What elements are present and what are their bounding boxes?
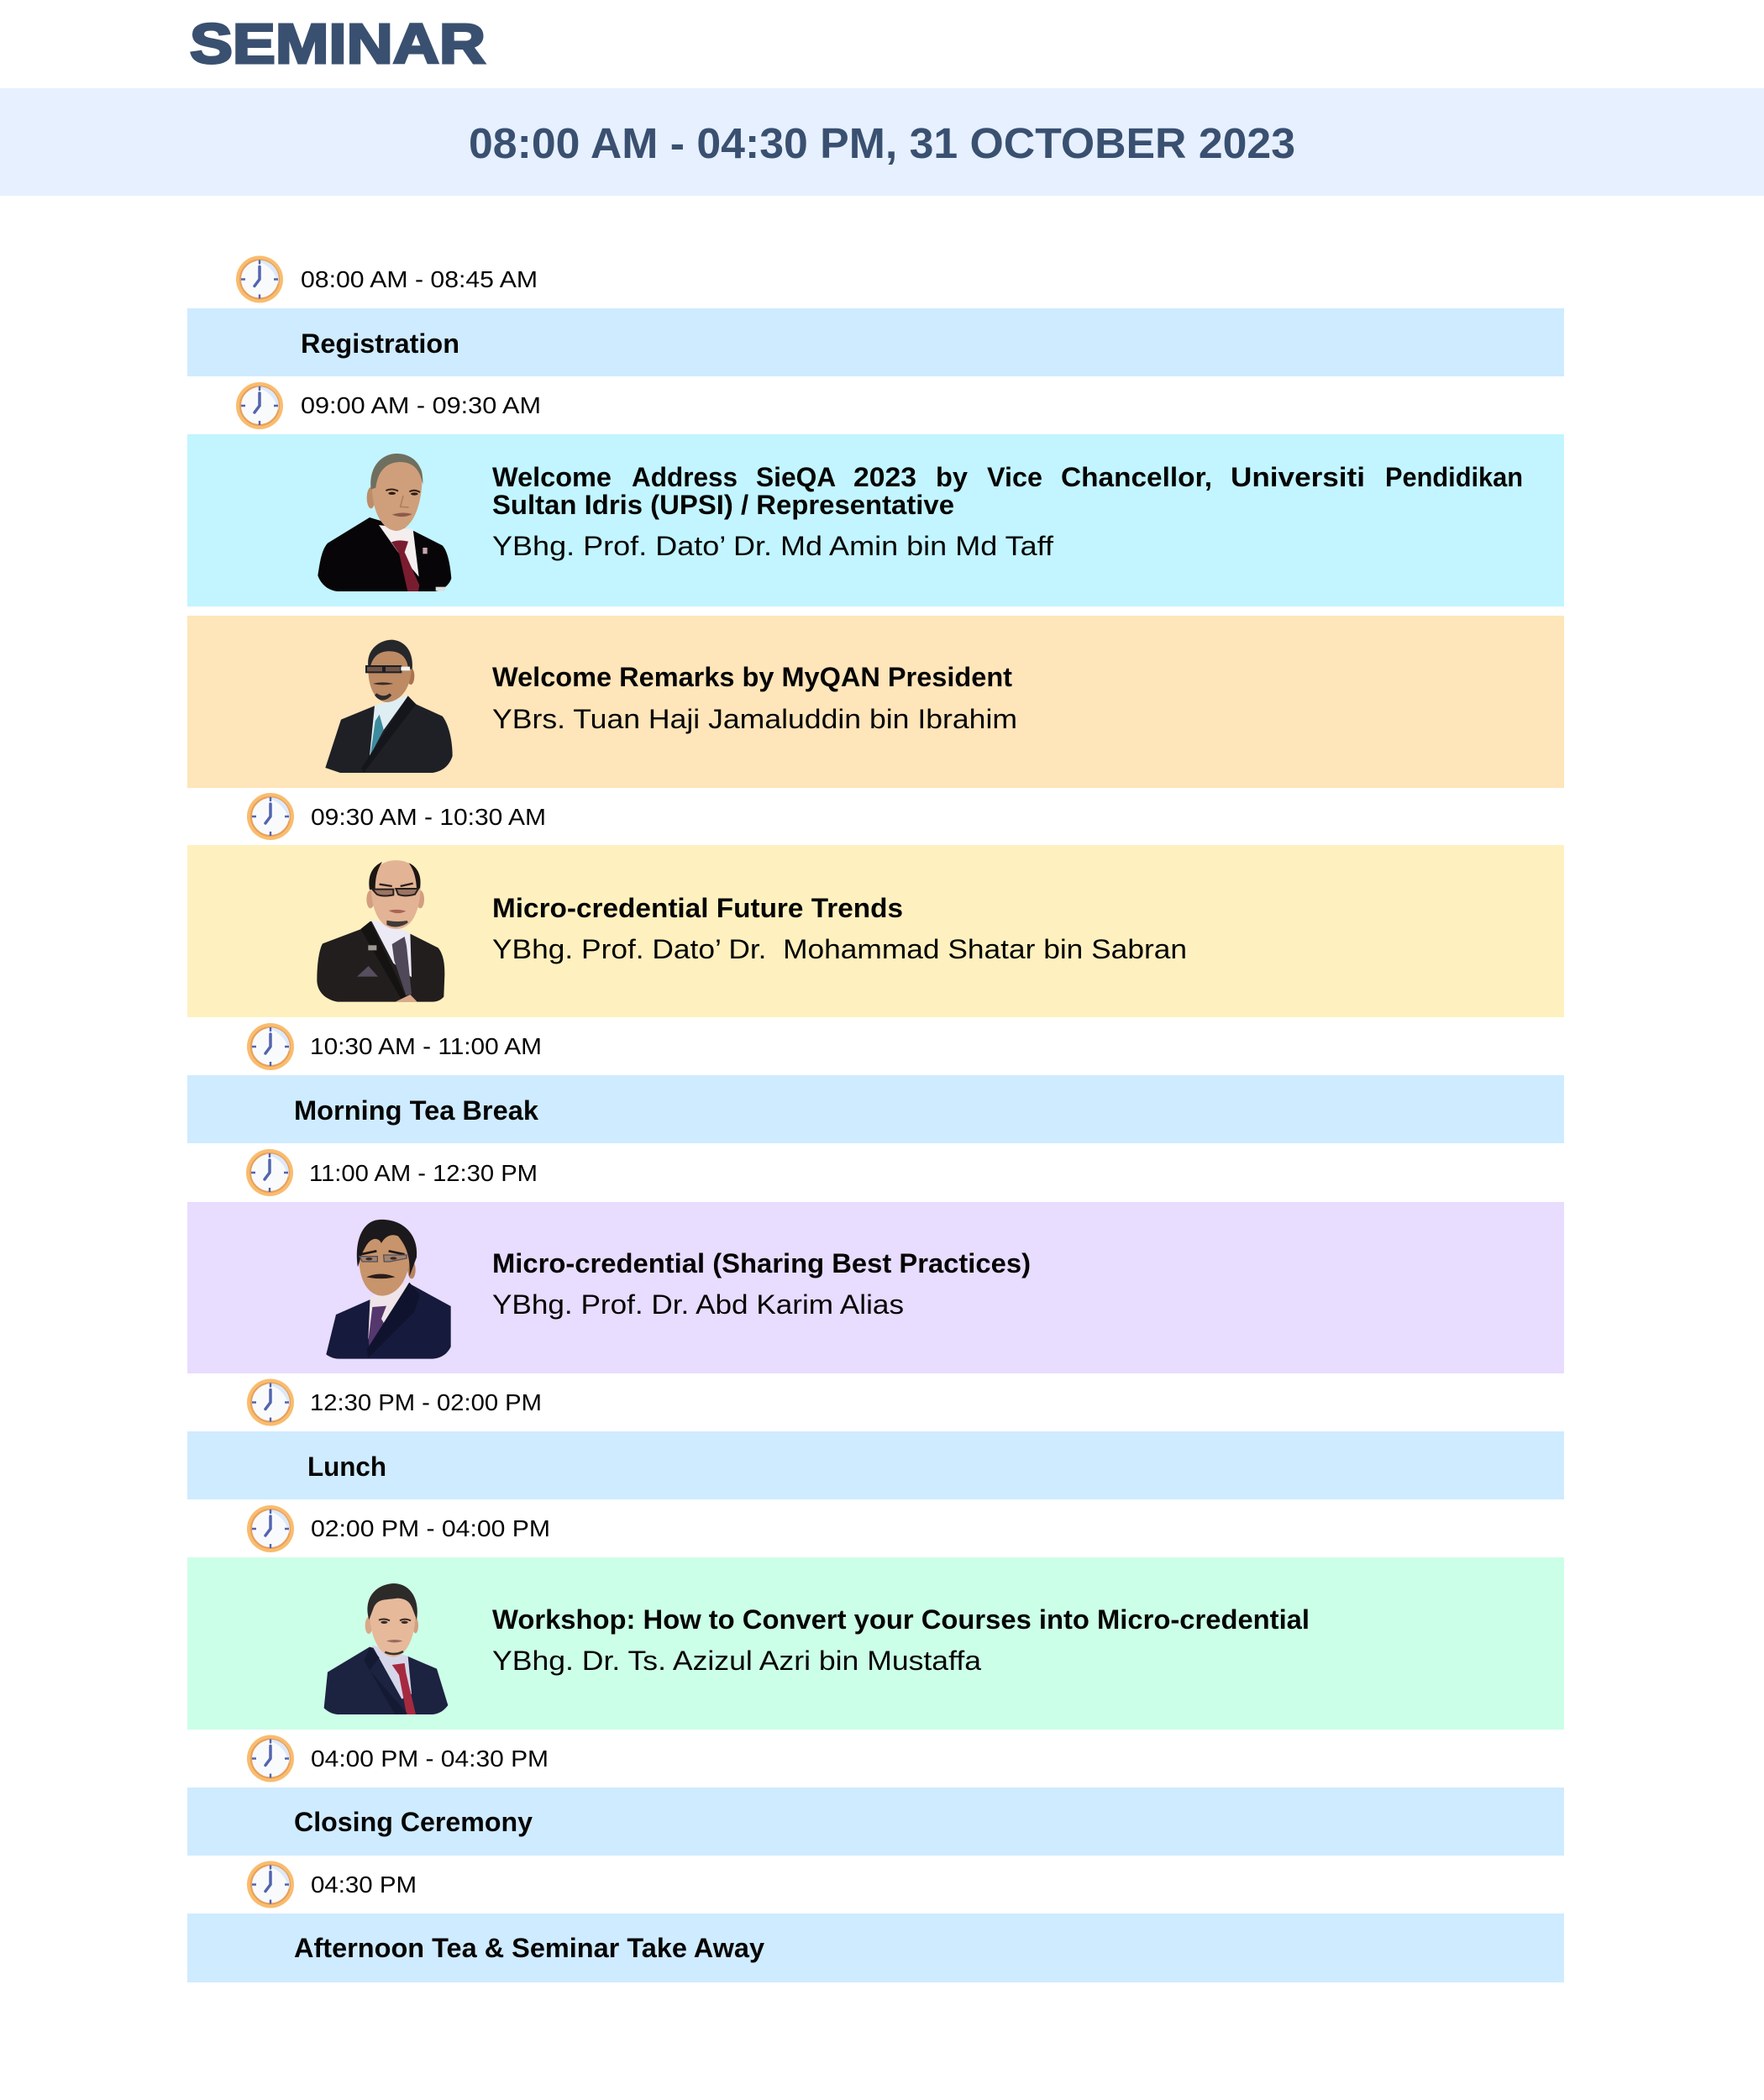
icon: clock (247, 1861, 294, 1908)
panel: morning tea break (187, 1075, 1564, 1143)
time slot: 08:00 (236, 255, 538, 302)
time slot: 02:00 (247, 1505, 550, 1552)
icon: clock (247, 1023, 294, 1070)
panel: registration (187, 308, 1564, 376)
time slot: 09:30: 09:30 AM - 10:30 AM (311, 804, 546, 830)
time slot: 09:00: 09:00 AM - 09:30 AM (301, 392, 541, 418)
title: SEMINAR (190, 13, 486, 76)
panel: welcome remarks: YBrs. Tuan Haji Jamaluddin bin Ibrahim (492, 704, 1017, 734)
panel: closing ceremony (187, 1788, 1564, 1856)
time slot: 11:00: 11:00 AM - 12:30 PM (309, 1160, 538, 1186)
time slot: 02:00: 02:00 PM - 04:00 PM (311, 1515, 550, 1541)
panel: welcome address: Vice (987, 462, 1042, 492)
panel: workshop: Workshop: How to Convert your Courses into Micro-credential (492, 1604, 1310, 1635)
time slot: 12:30: 12:30 PM - 02:00 PM (310, 1389, 542, 1415)
panel: welcome address: 2023 (853, 462, 916, 492)
panel: welcome address: Universiti (1231, 462, 1365, 492)
panel: sharing best practices (187, 1202, 1564, 1373)
panel: micro-credential future trends: Micro-credential Future Trends (492, 893, 903, 923)
time slot: 10:30: 10:30 AM - 11:00 AM (310, 1033, 542, 1059)
time slot: 10:30 (247, 1023, 542, 1070)
panel: sharing best practices: Micro-credential (Sharing Best Practices) (492, 1248, 1031, 1278)
panel: welcome address (187, 434, 1564, 606)
date banner: 08:00 AM - 04:30 PM, 31 OCTOBER 2023 (469, 119, 1295, 167)
time slot: 04:30: 04:30 PM (311, 1872, 417, 1898)
time slot: 09:30 (247, 793, 546, 840)
icon: clock (247, 1379, 294, 1426)
panel: welcome address: Welcome (492, 462, 612, 492)
portrait: vice chancellor (318, 454, 451, 591)
time slot: 12:30 (247, 1379, 542, 1426)
panel: welcome address: Address (632, 462, 738, 492)
panel: welcome address: Sultan Idris (UPSI) / Representative (492, 490, 954, 520)
panel: welcome remarks (187, 616, 1564, 788)
portrait: workshop speaker (324, 1583, 448, 1714)
icon: clock (236, 255, 283, 302)
panel: welcome address: Chancellor, (1061, 462, 1212, 492)
time slot: 08:00: 08:00 AM - 08:45 AM (301, 266, 538, 292)
icon: clock (247, 1505, 294, 1552)
panel: closing ceremony: Closing Ceremony (294, 1807, 533, 1837)
icon: clock (236, 382, 283, 429)
panel: micro-credential future trends (187, 845, 1564, 1017)
panel: welcome address: Pendidikan (1385, 462, 1523, 492)
time slot: 11:00 (246, 1149, 538, 1196)
time slot: 04:30 (247, 1861, 417, 1908)
time slot: 04:00: 04:00 PM - 04:30 PM (311, 1746, 549, 1772)
panel: sharing best practices: YBhg. Prof. Dr. Abd Karim Alias (492, 1289, 904, 1320)
panel: welcome address: by (936, 462, 968, 492)
icon: clock (247, 793, 294, 840)
panel: morning tea break: Morning Tea Break (294, 1095, 538, 1126)
panel: welcome address: YBhg. Prof. Dato’ Dr. Md Amin bin Md Taff (492, 531, 1053, 561)
panel: micro-credential future trends: YBhg. Prof. Dato’ Dr. Mohammad Shatar bin Sabran (492, 934, 1187, 964)
time slot: 09:00 (236, 382, 541, 429)
date banner (0, 88, 1764, 196)
icon: clock (247, 1735, 294, 1782)
panel: lunch (187, 1431, 1564, 1499)
portrait: keynote speaker (317, 860, 444, 1002)
panel: welcome address: SieQA (756, 462, 836, 492)
panel: registration: Registration (301, 328, 459, 359)
portrait: best practice speaker (326, 1220, 451, 1359)
icon: clock (246, 1149, 293, 1196)
panel: welcome remarks: Welcome Remarks by MyQAN President (492, 662, 1012, 692)
panel: workshop (187, 1557, 1564, 1730)
panel: afternoon tea: Afternoon Tea & Seminar Take Away (294, 1933, 764, 1963)
panel: lunch: Lunch (307, 1452, 386, 1482)
time slot: 04:00 (247, 1735, 549, 1782)
panel: workshop: YBhg. Dr. Ts. Azizul Azri bin Mustaffa (492, 1646, 981, 1676)
portrait: MyQAN president (325, 640, 453, 773)
panel: afternoon tea (187, 1914, 1564, 1982)
